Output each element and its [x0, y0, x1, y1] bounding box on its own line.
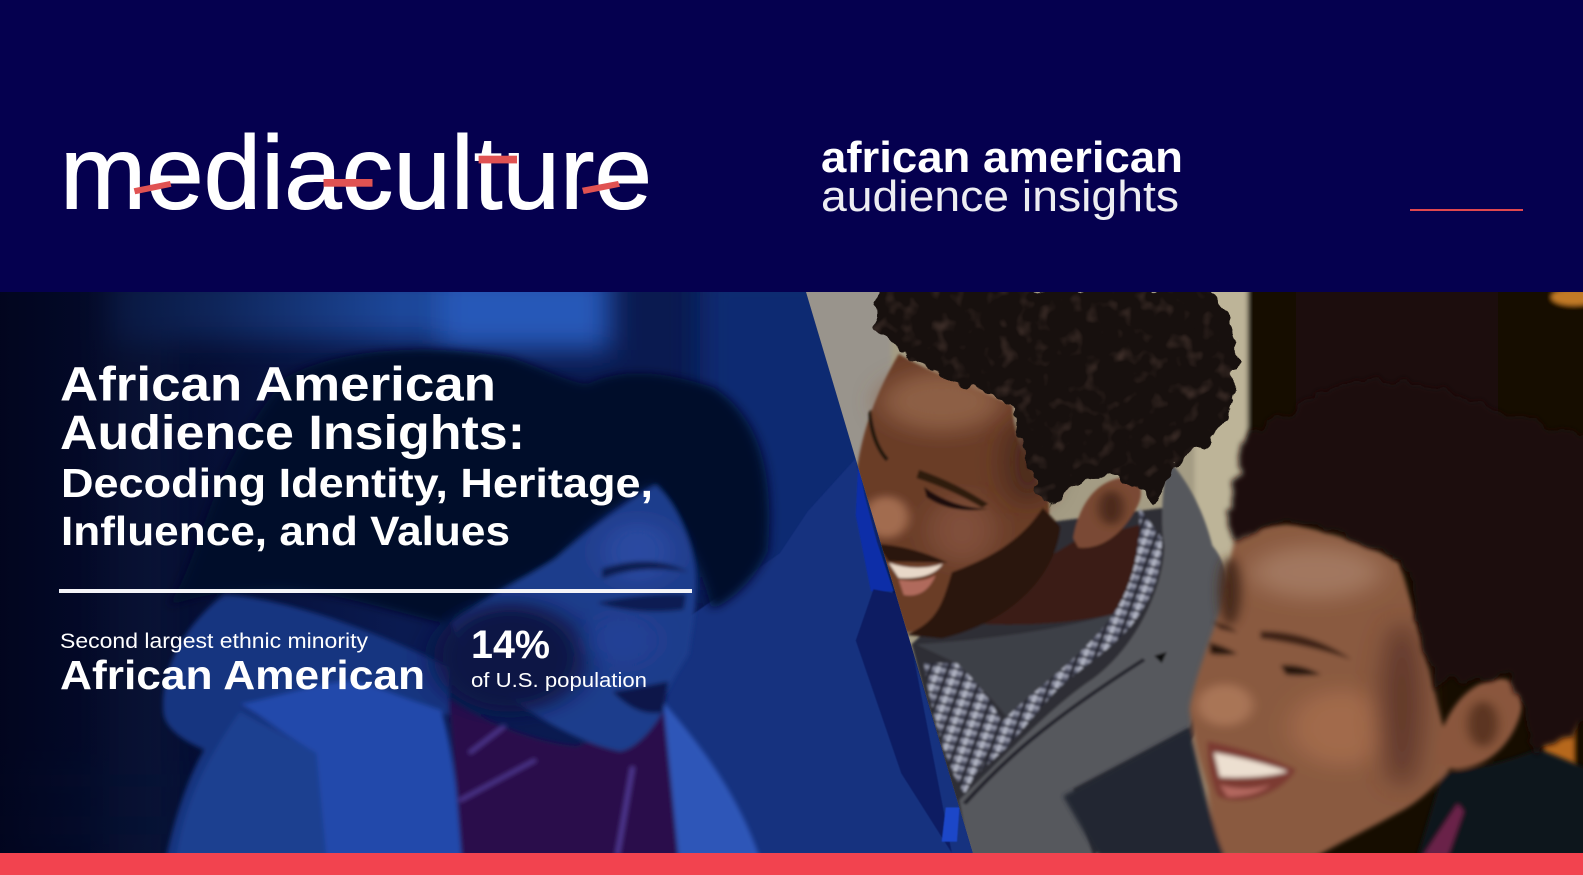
man's grey jacket	[959, 458, 1226, 857]
man figure	[856, 354, 1226, 857]
man's under-clothing base	[911, 508, 1225, 857]
man's beard	[906, 508, 1061, 639]
stat: ethnic minority: Second largest ethnic minority	[60, 630, 369, 653]
boy's ear	[1437, 678, 1522, 770]
man's eye and smile	[868, 409, 988, 596]
red accent line	[1410, 209, 1523, 211]
girl's hood and sweater	[163, 594, 449, 859]
title: Influence, and Values	[61, 508, 510, 554]
background blur columns	[104, 292, 888, 588]
stat: 14% of population: 14%	[471, 623, 550, 667]
girl's collar	[663, 702, 760, 859]
left darkening	[0, 292, 376, 853]
header tagline: african american	[821, 133, 1183, 182]
logo: mediaculture: mediaculture	[60, 116, 652, 232]
stat: 14% of population	[471, 623, 647, 692]
girl's scarf	[449, 698, 679, 859]
divider rule	[59, 589, 692, 593]
boy's dark jacket	[1063, 728, 1583, 857]
header tagline: audience insights	[821, 172, 1179, 221]
bottom red band	[0, 853, 1583, 875]
boy figure	[1063, 524, 1583, 857]
man's neck	[982, 525, 1140, 626]
girl's hair	[168, 349, 769, 623]
girl's face	[434, 485, 696, 751]
boy's hair	[1229, 379, 1583, 758]
photo: natural colour side	[780, 280, 1583, 861]
boy's eyes and brows	[1210, 622, 1351, 676]
street background	[806, 292, 1214, 853]
man's turtleneck	[920, 614, 1112, 716]
photo: blue duotone side	[0, 270, 990, 870]
title: African American	[60, 358, 496, 412]
stat: 14% of population: of U.S. population	[471, 670, 647, 692]
header tagline	[821, 133, 1183, 221]
man's hair	[873, 288, 1235, 504]
stat: ethnic minority	[60, 630, 425, 698]
man's face	[856, 354, 1053, 633]
title: Audience Insights:	[60, 407, 525, 460]
man's jacket blue part	[663, 460, 973, 853]
title: Decoding Identity, Heritage,	[61, 460, 653, 506]
boy's face	[1190, 524, 1453, 857]
stat: ethnic minority: African American	[60, 652, 425, 698]
title	[60, 358, 653, 554]
man's plaid shirt	[924, 508, 1162, 794]
header band	[0, 0, 1583, 292]
man's ear	[1073, 477, 1141, 548]
boy's smile	[1207, 741, 1296, 800]
